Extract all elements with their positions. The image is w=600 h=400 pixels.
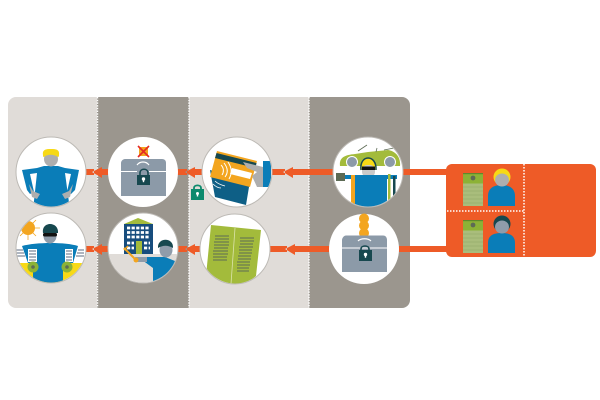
icon circle: building with key handover xyxy=(105,213,181,284)
icon circle: victim with empty pockets xyxy=(16,137,86,210)
arrow: bottom row, chest to document xyxy=(268,244,331,255)
icon circle: locked chest with red cross xyxy=(108,137,178,207)
icon circle: green document xyxy=(200,214,270,290)
icon circle: fraudster in sunglasses with cash xyxy=(16,213,86,284)
arrow: top row connector from box xyxy=(403,169,447,175)
icon: banknotes and blond person xyxy=(463,168,515,206)
icon circle: locked chest with gold coins xyxy=(329,214,399,284)
arrow: top row, cards to locked chest xyxy=(176,167,202,178)
panel: timeline background columns xyxy=(8,97,410,308)
arrow: bottom row, document to building xyxy=(176,244,202,255)
arrow: top row, vault to cards xyxy=(270,167,333,178)
icon circle: fraudster with sports car and money xyxy=(333,137,403,210)
icon circle: hand holding bank cards xyxy=(202,137,272,207)
arrow: top row, chest to victim xyxy=(85,167,108,178)
icon: small green padlock xyxy=(191,185,204,200)
arrow: bottom row connector from box xyxy=(399,246,447,252)
icon: banknotes and dark-haired person xyxy=(463,216,515,253)
arrow: bottom row, building to fraudster xyxy=(85,244,108,255)
panel: orange account box xyxy=(446,164,596,257)
